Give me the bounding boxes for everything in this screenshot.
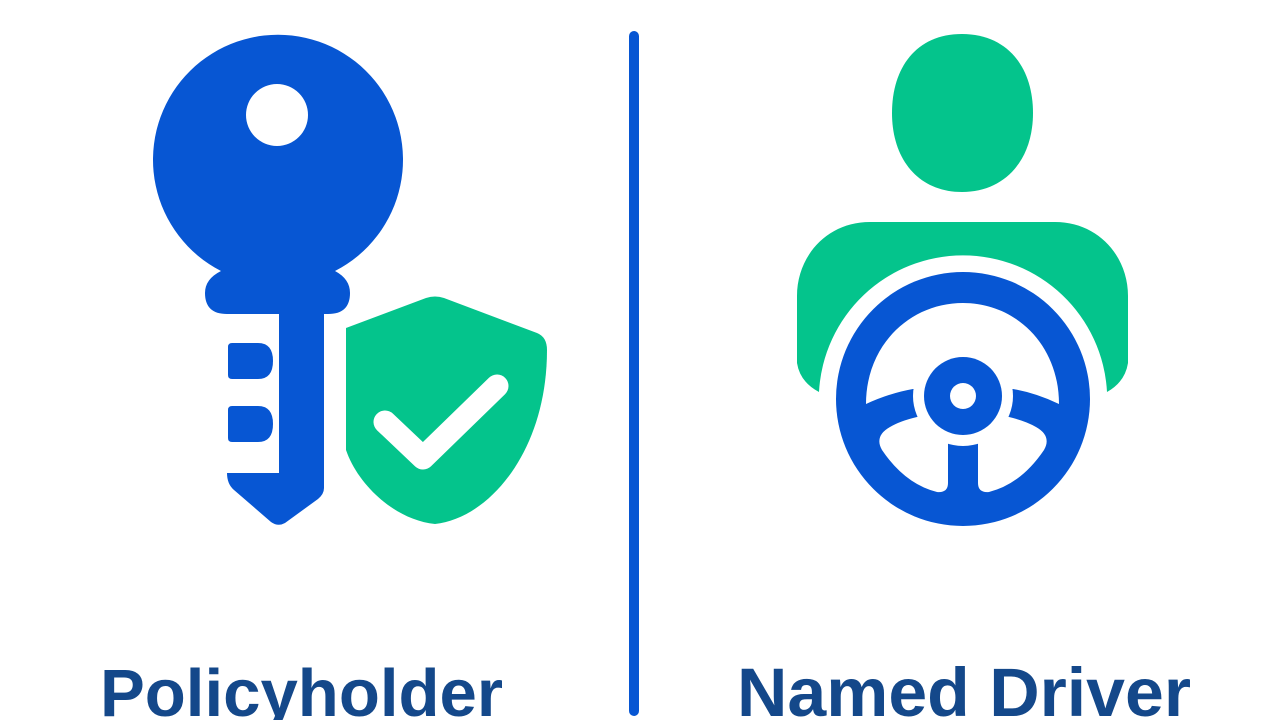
icon: key bbox=[153, 35, 403, 525]
key tooth lower bbox=[228, 406, 273, 442]
hub hole bbox=[950, 383, 976, 409]
icon: person body bbox=[797, 222, 1128, 392]
wheel lower-left opening bbox=[879, 410, 948, 492]
icon: steering wheel bbox=[836, 272, 1090, 526]
hub gap bbox=[913, 346, 1013, 446]
icon: person head bbox=[892, 34, 1033, 192]
wheel lower-right opening bbox=[978, 410, 1047, 492]
key tooth upper bbox=[228, 343, 273, 379]
check mark bbox=[385, 386, 497, 458]
divider bbox=[629, 31, 639, 716]
wheel upper opening bbox=[866, 303, 1059, 404]
icon: shield with check bbox=[346, 296, 547, 524]
wheel hub bbox=[924, 357, 1002, 435]
